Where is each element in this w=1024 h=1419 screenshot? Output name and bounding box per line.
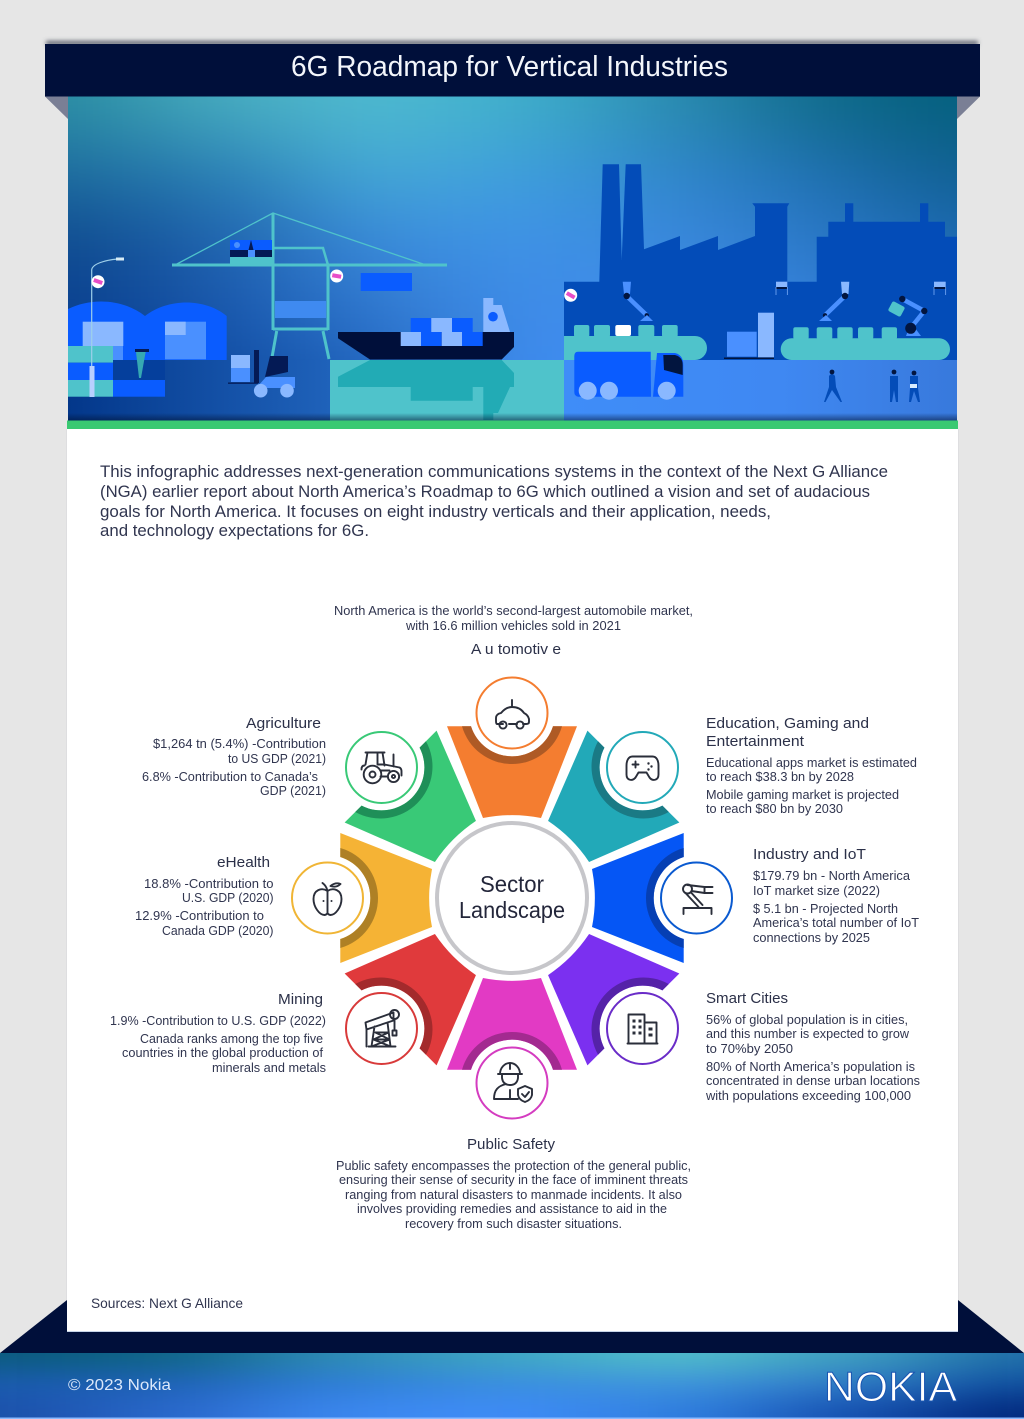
centre hub: Sector — [480, 871, 544, 897]
text block: mining — [110, 991, 326, 1075]
text block: agriculture — [142, 715, 326, 798]
icon: safety worker — [476, 1048, 548, 1118]
title: 6G Roadmap for Vertical Industries — [291, 51, 728, 83]
crane carried containers — [275, 273, 412, 318]
text block: ehealth: eHealth — [217, 854, 270, 871]
segment: agriculture — [345, 731, 501, 887]
text block: ehealth: Canada GDP (2020) — [162, 923, 274, 938]
text block: public safety: recovery from such disaster situations. — [405, 1216, 622, 1231]
text block: ehealth: U.S. GDP (2020) — [182, 890, 274, 905]
text block: automotive: with 16.6 million vehicles sold in 2021 — [405, 618, 621, 633]
main white panel — [67, 429, 958, 1332]
text block: mining: 1.9% -Contribution to U.S. GDP (2022) — [110, 1013, 326, 1028]
footer gradient — [0, 1353, 1024, 1418]
text block: agriculture: 6.8% -Contribution to Canada’s — [142, 769, 318, 784]
text block: agriculture: Agriculture — [246, 715, 321, 732]
text block: public safety: ensuring their sense of security in the face of imminent threats — [339, 1172, 688, 1187]
text block: smart cities: Smart Cities — [706, 990, 788, 1007]
text block: smart cities: with populations exceeding 100,000 — [705, 1088, 911, 1103]
text block: education, gaming and entertainment: Education, Gaming and — [706, 715, 869, 732]
ship reflection — [338, 360, 514, 420]
factory conveyor one — [564, 325, 707, 360]
text block: education, gaming and entertainment: Educational apps market is estimated — [706, 755, 917, 770]
sources note: Sources: Next G Alliance — [91, 1295, 243, 1311]
icon: tractor — [346, 732, 417, 803]
icon: buildings — [607, 993, 678, 1064]
text block: industry and iot: America’s total number of IoT — [753, 915, 919, 930]
text block: education, gaming and entertainment — [706, 715, 917, 816]
bottom navy base behind panel — [0, 1300, 1024, 1353]
copyright: © 2023 Nokia — [68, 1377, 171, 1394]
icon: robot arm — [661, 862, 732, 934]
text block: education, gaming and entertainment: to reach $38.3 bn by 2028 — [706, 769, 854, 784]
text block: mining: countries in the global production of — [122, 1045, 323, 1060]
icon: apple — [292, 862, 363, 934]
text block: smart cities: and this number is expected to grow — [706, 1026, 910, 1041]
text block: mining: Canada ranks among the top five — [140, 1031, 323, 1046]
factory ceiling lamps — [776, 282, 946, 295]
text block: industry and iot: connections by 2025 — [753, 930, 870, 945]
text block: public safety: ranging from natural disasters to manmade incidents. It also — [345, 1187, 682, 1202]
footer band — [0, 1353, 1024, 1419]
text block: agriculture: $1,264 tn (5.4%) -Contribution — [153, 736, 326, 751]
water — [330, 360, 564, 421]
warehouse domes — [68, 301, 227, 360]
intro paragraph: (NGA) earlier report about North America’s Roadmap to 6G which outlined a vision and set of audacious — [100, 482, 870, 501]
text block: automotive: North America is the world’s second-largest automobile market, — [334, 603, 693, 618]
crane — [172, 213, 447, 359]
centre hub — [437, 823, 587, 973]
text block: smart cities: concentrated in dense urban locations — [706, 1073, 920, 1088]
hero gradient sky — [68, 96, 957, 360]
text block: education, gaming and entertainment: to reach $80 bn by 2030 — [706, 801, 843, 816]
segment: public safety — [447, 978, 577, 1070]
crane cabin — [230, 240, 272, 265]
pink sensor badges — [92, 270, 577, 302]
factory silhouette — [564, 164, 957, 360]
text block: industry and iot: IoT market size (2022) — [753, 883, 880, 898]
segment: mining — [345, 909, 501, 1065]
text block: smart cities: 80% of North America’s population is — [706, 1059, 915, 1074]
centre hub: Landscape — [459, 897, 565, 923]
ground right — [564, 360, 574, 380]
hero illustration — [68, 96, 957, 420]
text block: public safety: involves providing remedies and assistance to aid in the — [357, 1201, 667, 1216]
text block: ehealth — [135, 854, 274, 938]
text block: automotive: A u tomotiv e — [471, 641, 561, 658]
icon: car — [476, 678, 548, 748]
green divider bar — [67, 420, 958, 429]
segment: ehealth — [340, 833, 432, 963]
text block: industry and iot — [753, 846, 919, 945]
text block: mining: Mining — [278, 991, 323, 1008]
street lamp — [90, 258, 124, 397]
ground left — [68, 360, 330, 421]
text block: ehealth: 12.9% -Contribution to — [135, 908, 264, 923]
segment: education and gaming — [523, 731, 679, 887]
text block: ehealth: 18.8% -Contribution to — [144, 876, 274, 891]
workers — [824, 370, 920, 402]
text block: public safety: Public Safety — [467, 1136, 556, 1153]
sector wheel — [292, 678, 732, 1118]
left banner fold — [45, 96, 68, 119]
text block: agriculture: GDP (2021) — [260, 783, 326, 798]
cargo ship — [338, 298, 514, 360]
robot arms — [623, 282, 928, 336]
segment: industry — [592, 833, 684, 963]
text block: smart cities — [705, 990, 920, 1103]
text block: smart cities: 56% of global population is in cities, — [706, 1012, 908, 1027]
right banner fold — [957, 96, 980, 119]
segment: smart cities — [523, 909, 679, 1065]
factory conveyor two — [781, 327, 950, 360]
text block: automotive — [334, 603, 693, 658]
icon: oil derrick — [346, 993, 417, 1064]
nokia logo: NOKIA — [824, 1363, 957, 1410]
forklift — [228, 350, 295, 398]
intro paragraph: and technology expectations for 6G. — [100, 521, 369, 540]
text block: industry and iot: $179.79 bn - North America — [753, 868, 911, 883]
person with binoculars — [135, 349, 149, 378]
text block: mining: minerals and metals — [212, 1060, 326, 1075]
container stacks — [68, 346, 165, 397]
intro paragraph — [100, 462, 888, 540]
text block: industry and iot: Industry and IoT — [753, 846, 866, 863]
text block: public safety — [336, 1136, 691, 1231]
text block: education, gaming and entertainment: Entertainment — [706, 733, 805, 750]
stacked crates — [724, 313, 774, 359]
segment: automotive — [447, 726, 577, 818]
text block: agriculture: to US GDP (2021) — [228, 751, 326, 766]
text block: public safety: Public safety encompasses the protection of the general public, — [336, 1158, 691, 1173]
text block: education, gaming and entertainment: Mobile gaming market is projected — [706, 787, 899, 802]
intro paragraph: goals for North America. It focuses on eight industry verticals and their application, needs, — [100, 502, 771, 521]
intro paragraph: This infographic addresses next-generation communications systems in the context of the Next G Alliance — [100, 462, 888, 481]
header banner — [45, 44, 980, 96]
text block: smart cities: to 70%by 2050 — [706, 1041, 793, 1056]
text block: industry and iot: $ 5.1 bn - Projected North — [753, 901, 898, 916]
autonomous truck — [574, 352, 683, 400]
icon: game controller — [607, 732, 678, 803]
